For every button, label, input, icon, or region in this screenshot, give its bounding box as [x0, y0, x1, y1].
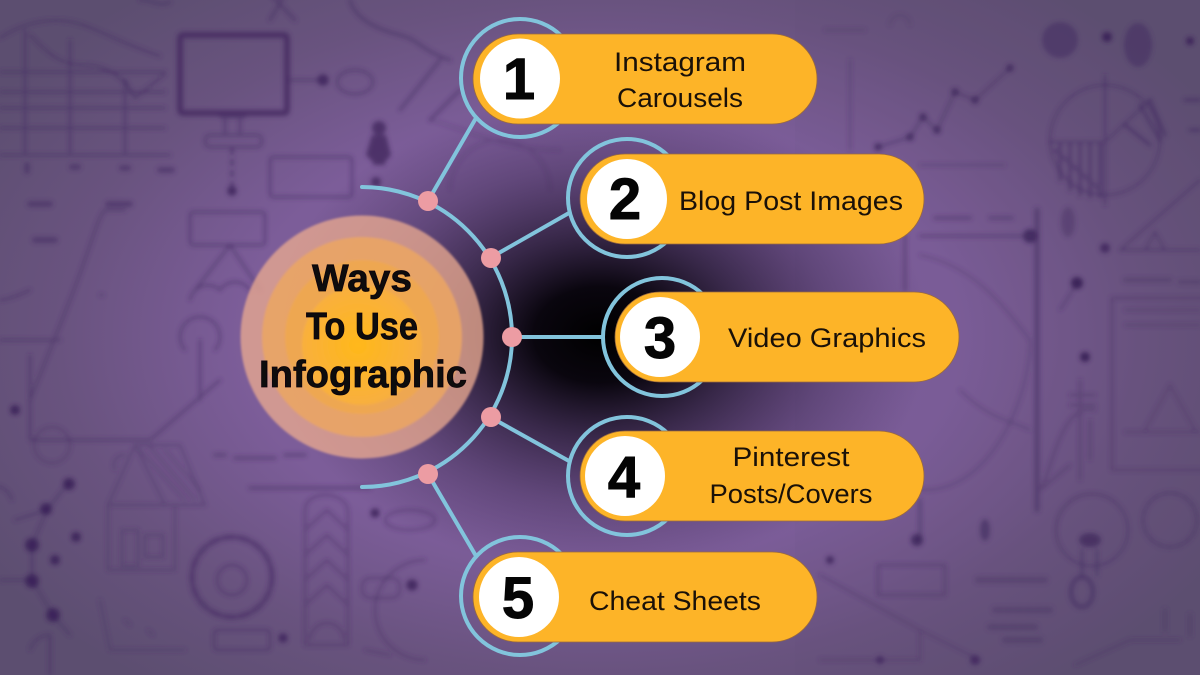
doodle: bottom right notes [820, 519, 1190, 665]
heading: ways to use infographic [259, 258, 467, 396]
doodle: left graph [0, 210, 220, 440]
item 5: cheat sheets: 5 [502, 566, 534, 631]
heading: ways to use infographic: Ways [312, 258, 412, 300]
doodle: pie chart [1050, 75, 1200, 205]
doodle: line chart top left [0, 21, 172, 240]
item 3: video graphics: 3 [644, 306, 676, 371]
item 2: blog post images: 2 [609, 167, 641, 232]
doodle: molecule bottom left [0, 405, 81, 675]
item 4: pinterest posts/covers [568, 417, 924, 535]
doodle: text strokes [215, 455, 370, 488]
item 2: blog post images [568, 139, 924, 257]
doodle: globe [192, 537, 287, 650]
doodle: triangles and annotation [935, 180, 1200, 470]
doodle: monitor [180, 35, 373, 300]
item 4: pinterest posts/covers: Pinterest [732, 442, 850, 472]
item 1: instagram carousels [461, 19, 817, 137]
background: dark centre glow [270, 95, 930, 575]
item 5: cheat sheets: Cheat Sheets [589, 586, 761, 616]
item 2: blog post images: Blog Post Images [679, 186, 903, 216]
doodle: top right circles and line chart [825, 15, 1194, 165]
heading: ways to use infographic: Infographic [259, 354, 467, 396]
doodle: central tall structure [830, 210, 1095, 540]
centre circle: concentric glowing rings [240, 216, 484, 458]
heading: ways to use infographic: To Use [306, 306, 418, 348]
background: seam [795, 0, 1200, 675]
doodle: faint central map [430, 120, 580, 300]
item 1: instagram carousels: 1 [503, 47, 535, 112]
connector: main arc [362, 187, 512, 487]
item 4: pinterest posts/covers: 4 [608, 445, 640, 510]
item 4: pinterest posts/covers: Posts/Covers [710, 479, 872, 509]
doodle: tower [305, 495, 348, 645]
item 3: video graphics [603, 278, 959, 396]
doodle: house [100, 445, 205, 650]
connector: branch lines [428, 118, 603, 556]
doodle: light bulb [1056, 493, 1197, 607]
doodle: figure [366, 121, 391, 187]
connector: pink nodes [418, 191, 522, 484]
item 5: cheat sheets [461, 537, 817, 655]
item 1: instagram carousels: Carousels [617, 83, 743, 113]
item 1: instagram carousels: Instagram [614, 47, 746, 77]
item 3: video graphics: Video Graphics [728, 323, 926, 353]
